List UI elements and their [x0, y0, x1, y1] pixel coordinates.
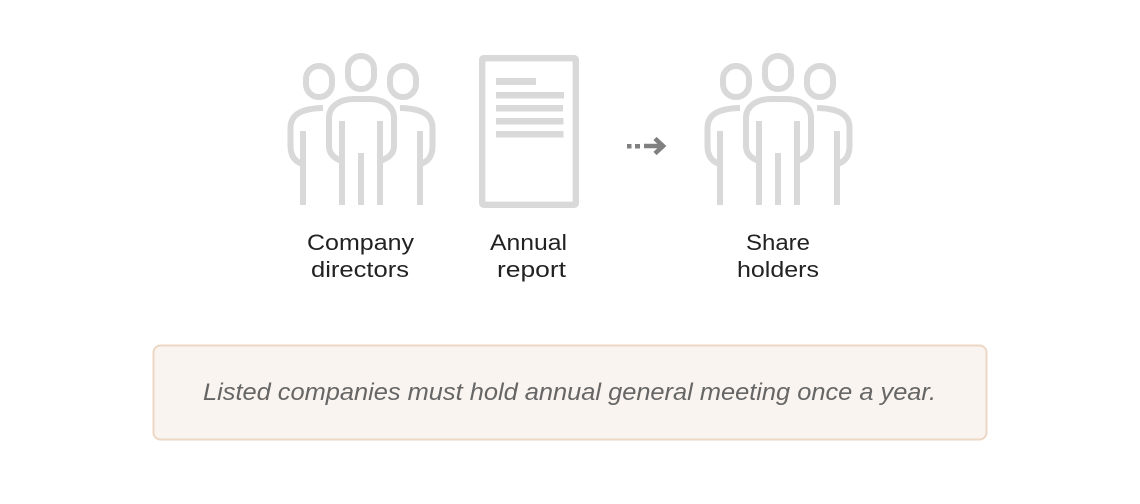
label: share holders: holders [737, 257, 819, 282]
arrow: report to share holders [627, 138, 663, 154]
label: company directors: Company [307, 230, 414, 255]
icon: company directors [290, 56, 432, 205]
label: share holders: Share [746, 230, 810, 255]
label: annual report [490, 230, 567, 282]
label: annual report: report [497, 257, 566, 282]
label: share holders [737, 230, 819, 282]
callout: annual general meeting [154, 346, 986, 440]
label: company directors [307, 230, 414, 282]
label: company directors: directors [311, 257, 409, 282]
icon: share holders [708, 56, 850, 205]
callout: annual general meeting: Listed companies must hold annual general meeting once a year. [203, 379, 936, 406]
icon: annual report document [482, 58, 576, 205]
label: annual report: Annual [490, 230, 567, 255]
